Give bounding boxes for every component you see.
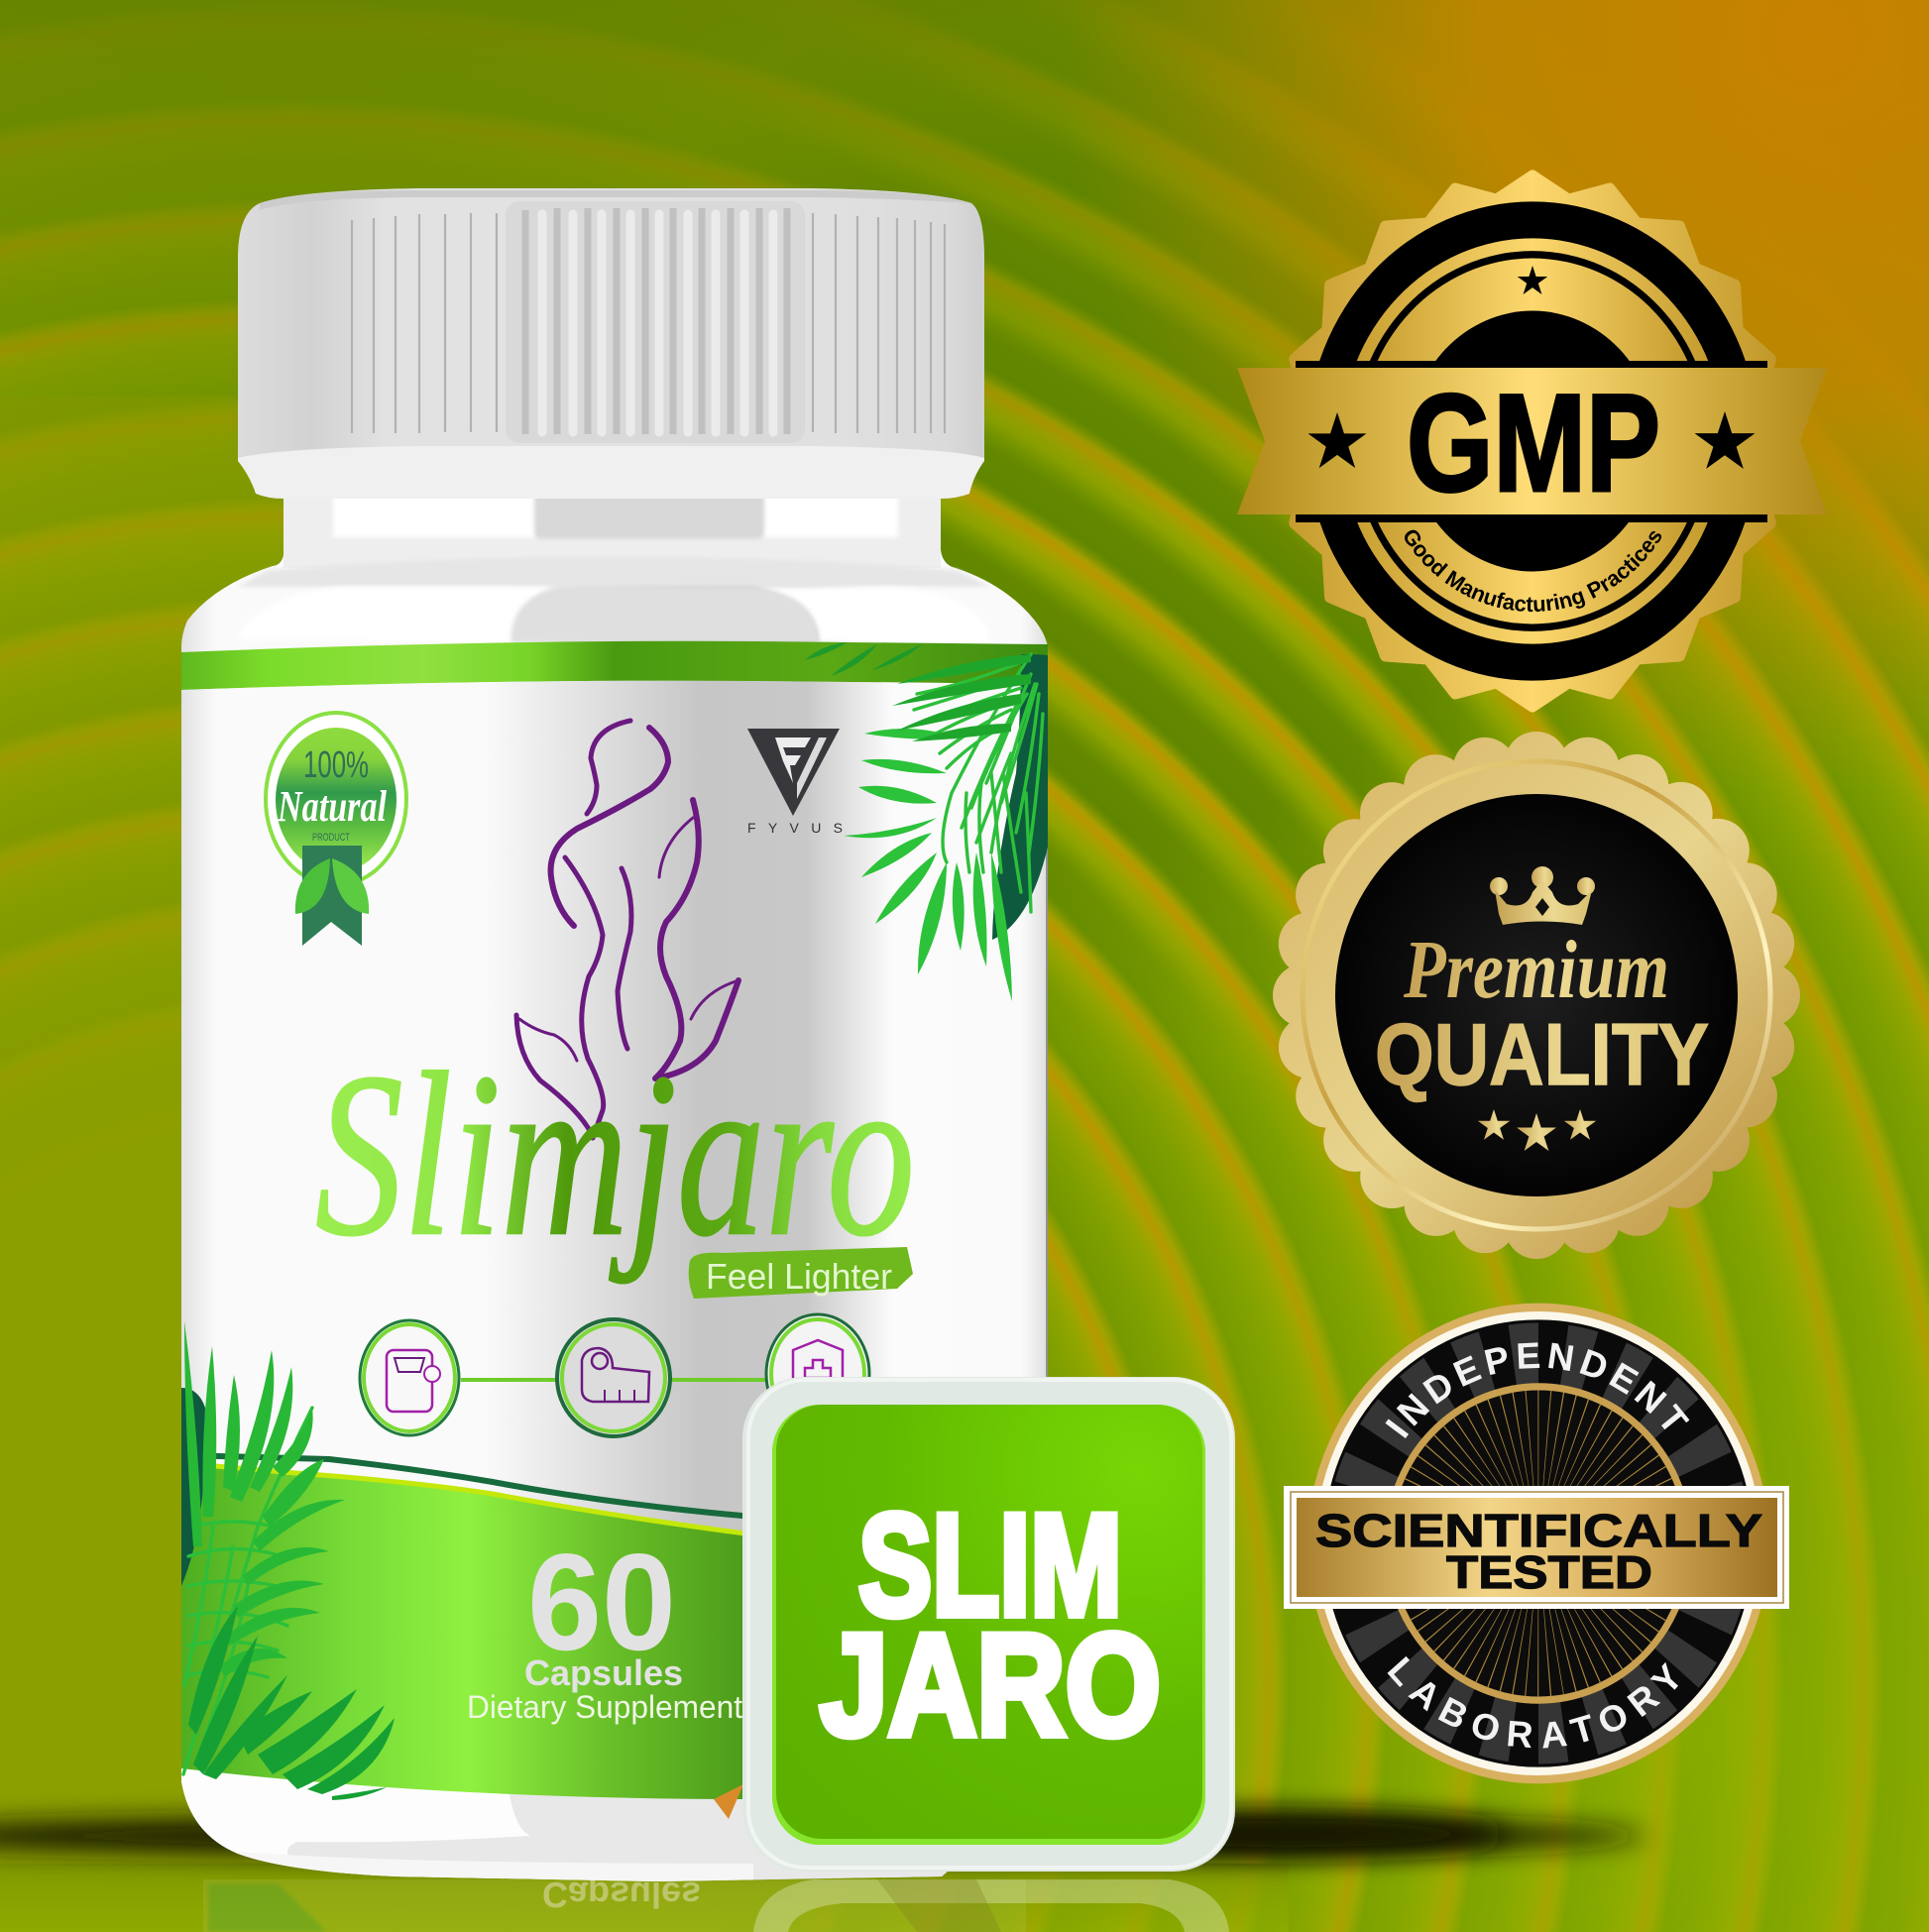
100% Natural badge: Natural bbox=[277, 782, 388, 831]
icon: measuring tape bbox=[557, 1319, 670, 1436]
gold seal bbox=[1283, 176, 1782, 706]
INDEPENDENT: INDEPENDENT bbox=[1386, 1342, 1689, 1438]
ground shadow bbox=[0, 1812, 1645, 1858]
bottle reflection on the floor: Capsules bbox=[542, 1875, 701, 1915]
star: top bbox=[1518, 266, 1547, 294]
cap ridges bbox=[260, 190, 971, 443]
palm sprigs along top band bbox=[805, 642, 922, 676]
leaves bbox=[295, 858, 369, 914]
icon: shield with cross bbox=[766, 1314, 869, 1433]
SCIENTIFICALLY: SCIENTIFICALLY bbox=[1315, 1505, 1762, 1556]
Good Manufacturing Practices: Good Manufacturing Practices bbox=[1405, 529, 1661, 613]
badge: Premium Quality bbox=[1294, 752, 1779, 1238]
100% Natural badge: 100% bbox=[303, 744, 369, 786]
QUALITY: QUALITY bbox=[1375, 1005, 1709, 1103]
Slim Jaro product box bbox=[714, 1377, 1235, 1872]
TESTED: TESTED bbox=[1446, 1546, 1652, 1598]
60 capsules count bbox=[467, 1526, 742, 1725]
Premium: Premium bbox=[1403, 924, 1669, 1016]
cap bbox=[238, 188, 984, 458]
bottle neck and shoulder highlights bbox=[238, 482, 991, 642]
palm frond: top right bbox=[844, 654, 1049, 1001]
lower green wave panel bbox=[181, 1455, 753, 1799]
icon: scale bbox=[360, 1320, 459, 1435]
body silhouette logo bbox=[516, 721, 738, 1138]
FYVUS logo bbox=[747, 729, 843, 836]
connector lines between icons bbox=[461, 1378, 768, 1382]
100% Natural badge bbox=[266, 713, 406, 946]
Feel Lighter tagline bbox=[689, 1247, 913, 1299]
bottle label and right edge bbox=[181, 681, 1048, 991]
GMP text: GMP bbox=[1407, 365, 1660, 520]
cap flange bbox=[238, 431, 984, 499]
60 capsules count: Capsules bbox=[524, 1652, 683, 1693]
Slimjaro wordmark: Slimjaro bbox=[315, 1025, 915, 1284]
gold ribbon bbox=[1237, 368, 1827, 514]
Feel Lighter tagline: Feel Lighter bbox=[706, 1256, 892, 1297]
bottle body bbox=[181, 496, 1048, 1881]
Slim Jaro product box: SLIM bbox=[858, 1484, 1122, 1646]
badge: GMP bbox=[1237, 170, 1827, 713]
gold banner bbox=[1284, 1486, 1789, 1609]
star: left bbox=[1308, 412, 1366, 468]
black bars behind ribbon bbox=[1296, 361, 1767, 522]
lower white bottle base bbox=[181, 1768, 948, 1881]
badge: Scientifically Tested bbox=[1284, 1303, 1789, 1784]
60 capsules count: Dietary Supplement bbox=[467, 1689, 742, 1725]
star: right bbox=[1695, 411, 1755, 469]
bottle reflection on the floor bbox=[203, 1875, 1229, 1932]
palm frond: bottom left bbox=[181, 1321, 395, 1800]
round seal bbox=[1311, 1307, 1765, 1779]
Slim Jaro product box: JARO bbox=[820, 1604, 1161, 1765]
bottle bbox=[181, 188, 1049, 1883]
ribbon bbox=[302, 846, 362, 946]
scalloped seal bbox=[1294, 752, 1779, 1238]
three stars bbox=[1478, 1109, 1596, 1151]
crown bbox=[1490, 866, 1595, 925]
top green label band bbox=[181, 641, 1048, 690]
LABORATORY: LABORATORY bbox=[1388, 1655, 1678, 1749]
100% Natural badge: PRODUCT bbox=[312, 832, 350, 844]
FYVUS logo: FYVUS bbox=[747, 820, 843, 836]
60 capsules count: 60 bbox=[527, 1526, 676, 1679]
